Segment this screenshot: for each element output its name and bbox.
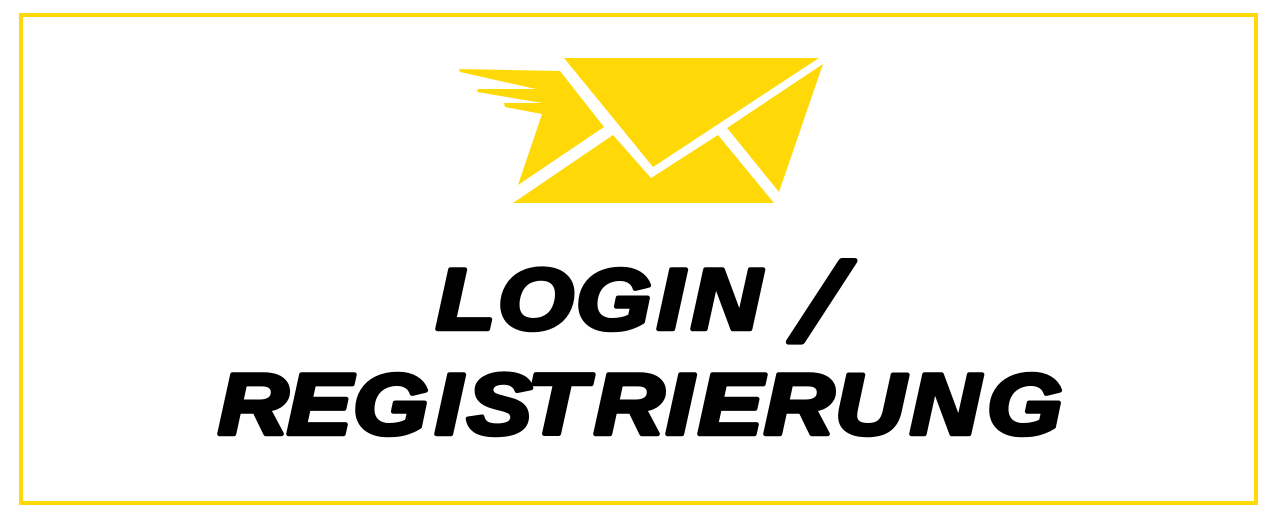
- title: [218, 243, 1063, 453]
- envelope top flap: [564, 58, 819, 167]
- title line 2: REGISTRIERUNG: [218, 357, 1063, 453]
- icon: flying envelope: [459, 58, 823, 203]
- envelope bottom: [513, 135, 774, 203]
- title line 1: LOGIN: [436, 252, 763, 348]
- envelope right side: [727, 64, 823, 192]
- slash: /: [783, 243, 859, 363]
- envelope left side with speed lines: [459, 69, 604, 185]
- title line 1: [436, 243, 859, 363]
